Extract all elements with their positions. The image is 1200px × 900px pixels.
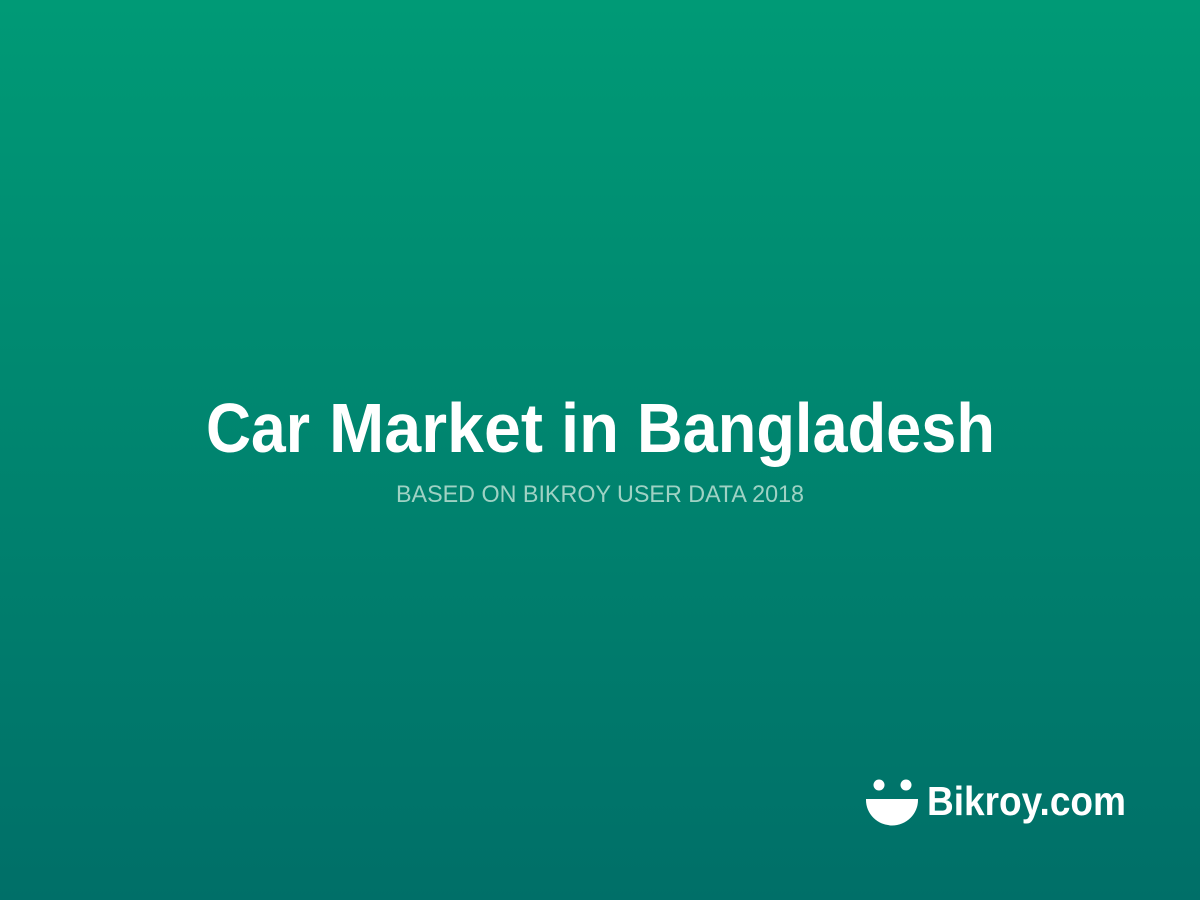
icon: smiley	[866, 780, 918, 826]
title: Market	[329, 389, 543, 467]
logo: Bikroy.com	[866, 778, 1126, 826]
title: in	[561, 389, 619, 467]
logo wordmark: Bikroy.com	[927, 778, 1126, 824]
title: Bangladesh	[637, 389, 995, 467]
subtitle: BASED ON BIKROY USER DATA 2018	[396, 481, 804, 508]
title: Car	[206, 389, 310, 467]
title	[206, 389, 995, 467]
